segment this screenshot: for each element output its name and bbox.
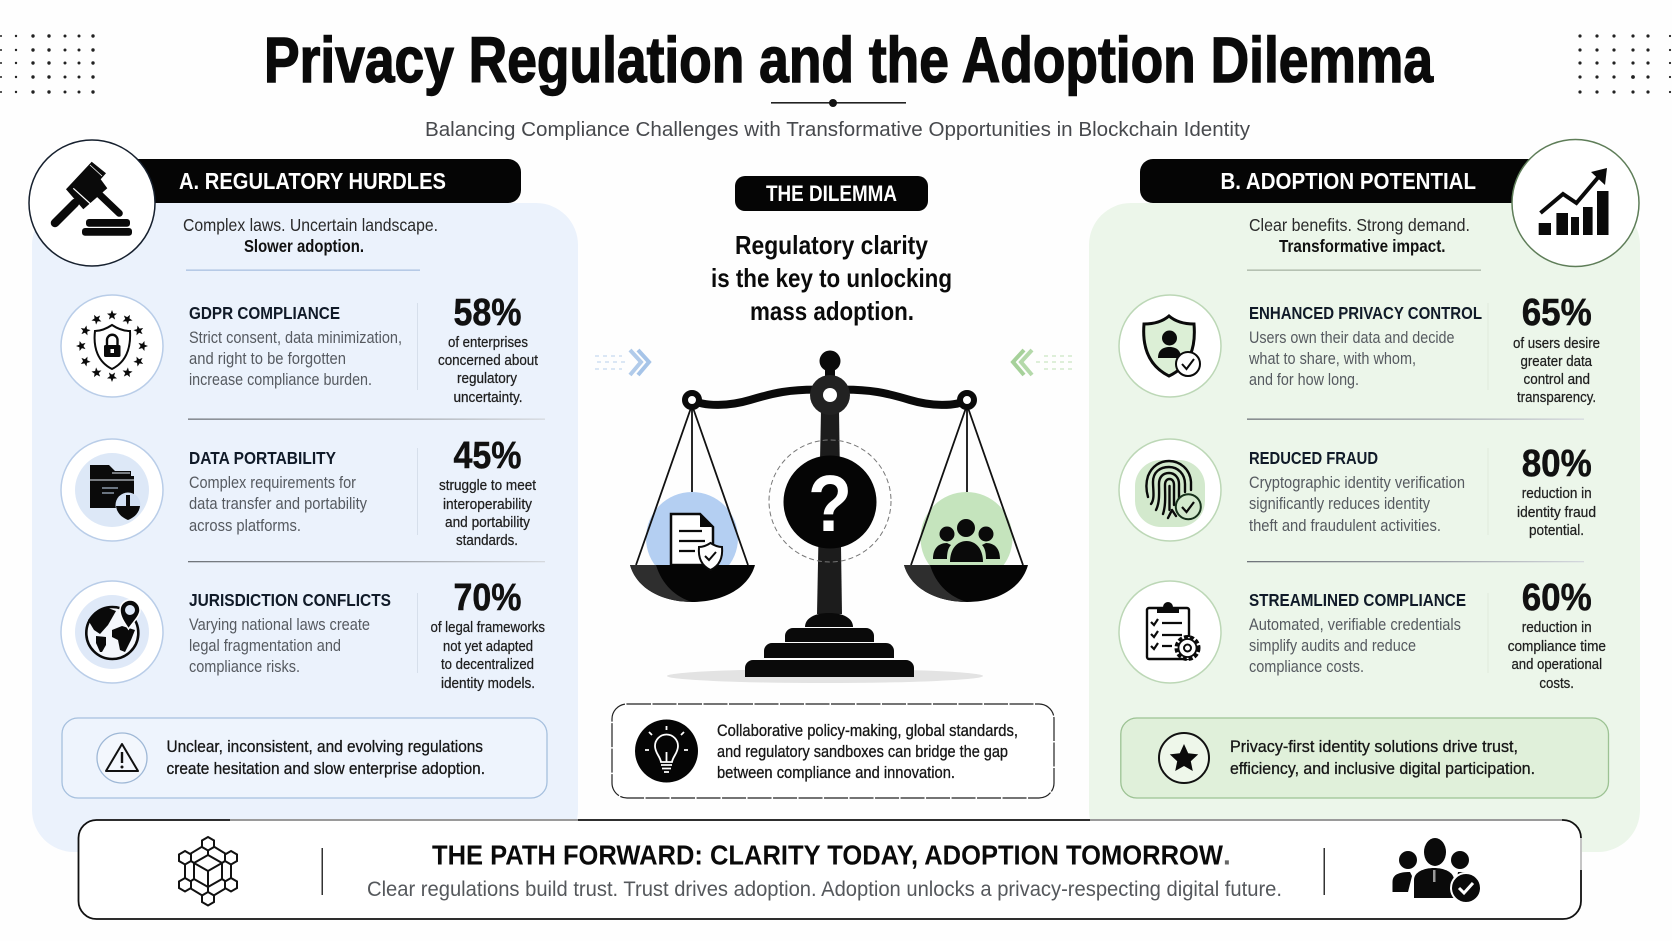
dashed ring: [769, 440, 891, 562]
row: jurisdiction conflicts: legal fragmentation and: [189, 637, 341, 655]
subtitle: Balancing Compliance Challenges with Transformative Opportunities in Blockchain Identity: [425, 119, 1250, 141]
row: streamlined compliance: compliance costs.: [1249, 658, 1364, 676]
row: GDPR compliance: Strict consent, data minimization,: [189, 329, 402, 347]
row: GDPR compliance: GDPR COMPLIANCE: [189, 303, 340, 323]
row: data portability: [61, 435, 537, 549]
callout: collaborative policy-making: between compliance and innovation.: [717, 763, 955, 782]
panel B heading bar: [1140, 159, 1560, 203]
row: reduced fraud: 80%: [1522, 443, 1592, 485]
dilemma statement: is the key to unlocking: [711, 263, 952, 293]
row: streamlined compliance: and operational: [1512, 656, 1602, 673]
dilemma statement: Regulatory clarity: [735, 230, 928, 260]
row: data portability: DATA PORTABILITY: [189, 448, 336, 468]
row: jurisdiction conflicts: to decentralized: [441, 656, 534, 673]
title divider: [771, 99, 906, 107]
the dilemma label: [735, 176, 928, 211]
panel: adoption potential background: [1089, 203, 1640, 852]
icon: light bulb: [635, 720, 698, 782]
dilemma statement: [711, 230, 952, 326]
row: enhanced privacy control: control and: [1524, 371, 1590, 388]
row: streamlined compliance: STREAMLINED COMPLIANCE: [1249, 590, 1466, 610]
panel B intro text: Transformative impact.: [1279, 236, 1446, 256]
row: GDPR compliance: increase compliance burden.: [189, 371, 372, 389]
icon: warning triangle: [97, 733, 147, 783]
row: GDPR compliance: uncertainty.: [454, 389, 522, 406]
row: data portability: Complex requirements for: [189, 474, 356, 492]
callout: unclear regulations: Unclear, inconsistent, and evolving regulations: [166, 737, 483, 756]
row: reduced fraud: [1119, 439, 1596, 541]
footer banner: Clear regulations build trust. Trust drives adoption. Adoption unlocks a privacy-respecting digital future.: [367, 878, 1282, 901]
icon: shield with person: [1119, 295, 1221, 397]
footer banner: [78, 820, 1581, 919]
panel B intro text: [1249, 215, 1470, 256]
decorative dots: top right: [1578, 34, 1671, 94]
panel A intro text: Complex laws. Uncertain landscape.: [183, 215, 438, 235]
row: data portability: 45%: [454, 435, 522, 477]
row: enhanced privacy control: of users desire: [1513, 335, 1600, 352]
row: jurisdiction conflicts: [61, 577, 545, 692]
panel A intro text: Slower adoption.: [244, 236, 364, 256]
row: jurisdiction conflicts: compliance risks.: [189, 658, 300, 676]
title: Privacy Regulation and the Adoption Dilemma: [264, 24, 1433, 96]
right pan with people: [904, 519, 1028, 602]
row: data portability: across platforms.: [189, 517, 301, 535]
row: reduced fraud: significantly reduces identity: [1249, 495, 1431, 513]
left pan with document: [630, 514, 755, 602]
callout: privacy-first solutions: Privacy-first identity solutions drive trust,: [1230, 737, 1518, 756]
row: data portability: and portability: [445, 514, 530, 531]
row: streamlined compliance: 60%: [1522, 577, 1592, 619]
row: enhanced privacy control: transparency.: [1517, 389, 1596, 406]
callout: privacy-first solutions: [1121, 718, 1608, 798]
row: streamlined compliance: reduction in: [1522, 619, 1592, 636]
row: reduced fraud: Cryptographic identity verification: [1249, 474, 1465, 492]
pedestal base: [745, 613, 914, 677]
row: reduced fraud: theft and fraudulent activities.: [1249, 517, 1441, 535]
row: streamlined compliance: costs.: [1539, 675, 1574, 692]
row: enhanced privacy control: ENHANCED PRIVACY CONTROL: [1249, 303, 1482, 323]
icon: blockchain cubes: [179, 837, 237, 906]
icon: growth chart: [1512, 140, 1639, 266]
row: jurisdiction conflicts: identity models.: [441, 675, 535, 692]
row: reduced fraud: identity fraud: [1517, 504, 1596, 521]
icon: gavel: [29, 140, 155, 266]
icon: star in circle: [1159, 733, 1209, 783]
row: jurisdiction conflicts: of legal frameworks: [430, 619, 545, 636]
row: data portability: struggle to meet: [439, 477, 537, 494]
row: data portability: standards.: [456, 532, 518, 549]
row: GDPR compliance: 58%: [454, 292, 522, 334]
arrow: green pointing left: [1013, 350, 1072, 375]
callout: collaborative policy-making: [612, 704, 1054, 798]
question mark disc: [784, 456, 876, 548]
icon: globe with pin: [61, 581, 163, 683]
footer banner: .: [1223, 840, 1231, 870]
row: enhanced privacy control: and for how long.: [1249, 371, 1359, 389]
row: enhanced privacy control: greater data: [1520, 353, 1593, 370]
row: data portability: interoperability: [443, 496, 532, 513]
callout: unclear regulations: create hesitation and slow enterprise adoption.: [166, 759, 485, 778]
decorative dots: top left: [0, 34, 95, 94]
panel A heading bar: [120, 159, 521, 203]
row: enhanced privacy control: what to share, with whom,: [1248, 350, 1416, 368]
icon: folder with download: [61, 439, 163, 541]
row: GDPR compliance: and right to be forgotten: [189, 350, 346, 368]
callout: collaborative policy-making: Collaborative policy-making, global standards,: [717, 721, 1018, 740]
row: reduced fraud: potential.: [1529, 522, 1584, 539]
row: jurisdiction conflicts: not yet adapted: [443, 638, 533, 655]
row: reduced fraud: reduction in: [1522, 485, 1592, 502]
the dilemma label: THE DILEMMA: [766, 181, 897, 206]
panel B heading bar: B. ADOPTION POTENTIAL: [1220, 168, 1476, 194]
row: enhanced privacy control: 65%: [1522, 292, 1592, 334]
row: jurisdiction conflicts: JURISDICTION CONFLICTS: [189, 590, 391, 610]
dilemma statement: mass adoption.: [750, 296, 914, 326]
row: jurisdiction conflicts: 70%: [454, 577, 522, 619]
row: GDPR compliance: of enterprises: [448, 334, 528, 351]
panel A heading bar: A. REGULATORY HURDLES: [179, 168, 446, 194]
icon: EU stars shield lock: [61, 295, 163, 397]
row: GDPR compliance: [61, 292, 539, 406]
icon: clipboard with gear: [1119, 581, 1221, 683]
row: streamlined compliance: simplify audits and reduce: [1249, 637, 1416, 655]
row: data portability: data transfer and portability: [189, 495, 368, 513]
callout: privacy-first solutions: efficiency, and inclusive digital participation.: [1230, 759, 1535, 778]
row: GDPR compliance: regulatory: [457, 370, 517, 387]
question mark disc: ?: [808, 459, 852, 548]
footer banner: THE PATH FORWARD: CLARITY TODAY, ADOPTION TOMORROW: [432, 840, 1224, 870]
row: jurisdiction conflicts: Varying national laws create: [189, 616, 370, 634]
icon: people with check: [1392, 838, 1481, 903]
row: streamlined compliance: compliance time: [1508, 638, 1606, 655]
callout: collaborative policy-making: and regulatory sandboxes can bridge the gap: [717, 742, 1008, 761]
panel B intro text: Clear benefits. Strong demand.: [1249, 215, 1470, 235]
arrow: blue pointing right: [595, 350, 649, 375]
row: streamlined compliance: [1119, 577, 1606, 692]
icon: fingerprint with check: [1119, 439, 1221, 541]
row: streamlined compliance: Automated, verifiable credentials: [1249, 616, 1461, 634]
row: GDPR compliance: concerned about: [438, 352, 539, 369]
panel A intro text: [183, 215, 438, 256]
balance scale illustration: [630, 350, 1028, 683]
callout: unclear regulations: [62, 718, 547, 798]
panel: regulatory hurdles background: [32, 203, 578, 852]
row: reduced fraud: REDUCED FRAUD: [1249, 448, 1378, 468]
row: enhanced privacy control: Users own their data and decide: [1249, 329, 1454, 347]
row: enhanced privacy control: [1119, 292, 1600, 406]
